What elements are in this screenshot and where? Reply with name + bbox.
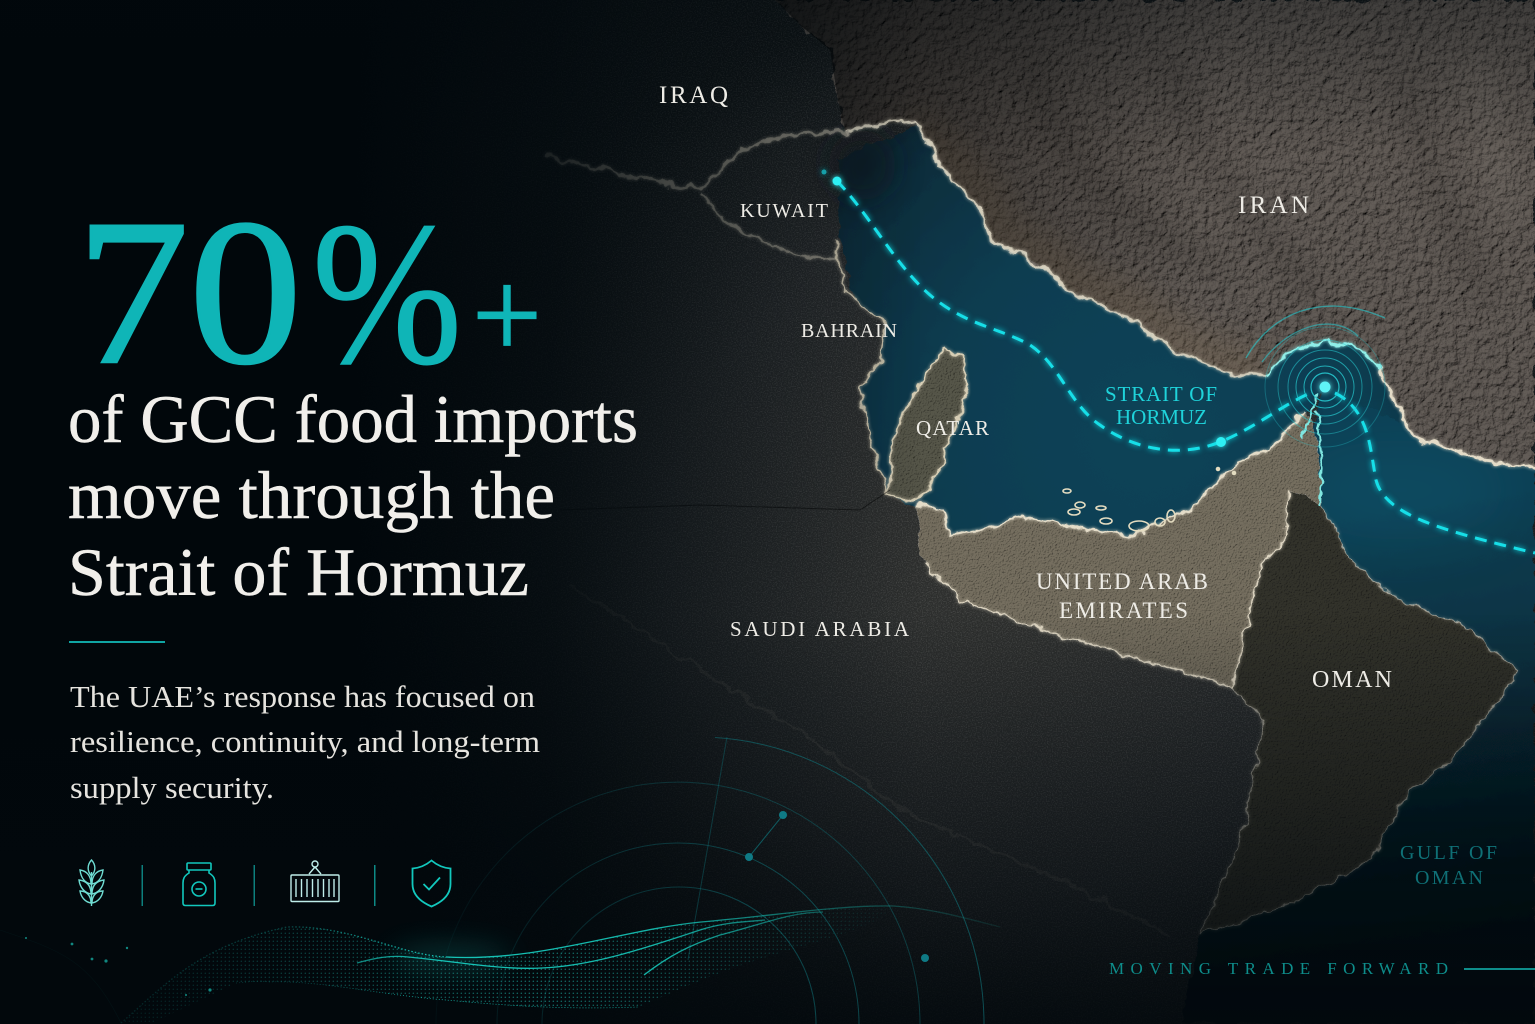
shipping route: Kuwait to strait — [822, 170, 1535, 553]
map: islands off the UAE — [1063, 468, 1236, 531]
water glow near strait — [1290, 440, 1510, 540]
divider rule — [69, 641, 165, 643]
map: Persian Gulf water — [838, 120, 1535, 1024]
heading — [68, 381, 638, 610]
decorative network arcs — [436, 737, 984, 1024]
map labels: KUWAIT — [740, 200, 828, 222]
headline stat: + — [472, 244, 542, 386]
separator — [142, 865, 143, 906]
map labels: OMAN — [1312, 667, 1392, 693]
map labels — [659, 82, 1392, 693]
icon: shield with check — [412, 860, 450, 906]
icon: shipping container — [291, 861, 339, 902]
map labels: BAHRAIN — [801, 320, 897, 342]
label: Strait of Hormuz: HORMUZ — [1116, 405, 1207, 429]
body text — [70, 679, 540, 805]
body text: The UAE’s response has focused on — [70, 679, 536, 714]
label: Gulf of Oman — [1400, 842, 1497, 889]
label: Strait of Hormuz: STRAIT OF — [1105, 382, 1217, 406]
separator — [254, 865, 255, 906]
headline stat: 70 — [76, 177, 302, 407]
map labels: QATAR — [916, 416, 989, 440]
strait radar target — [1246, 306, 1385, 447]
map: Qatar land — [888, 348, 968, 500]
heading: Strait of Hormuz — [68, 534, 529, 610]
map: Oman land — [1200, 490, 1518, 935]
body text: supply security. — [70, 770, 274, 805]
body text: resilience, continuity, and long-term — [70, 724, 540, 759]
map: Iran landmass — [760, 0, 1535, 480]
map labels: IRAN — [1238, 192, 1309, 219]
map labels: UNITED ARAB — [1036, 569, 1208, 594]
icon: jar — [183, 863, 215, 906]
label: Gulf of Oman: OMAN — [1415, 867, 1483, 889]
network nodes — [745, 811, 929, 962]
heading: move through the — [68, 457, 555, 533]
shaded head of the gulf — [828, 129, 896, 201]
route: strait to Gulf of Oman — [1335, 393, 1535, 553]
headline stat — [76, 177, 542, 407]
map labels: EMIRATES — [1059, 598, 1188, 623]
separator — [374, 865, 376, 906]
map labels: IRAQ — [659, 82, 728, 109]
tagline: moving trade forward: MOVING TRADE FORWARD — [1109, 959, 1448, 978]
map: coastlines — [545, 120, 1535, 935]
map: UAE land — [915, 410, 1320, 688]
icon: wheat — [79, 860, 104, 906]
heading: of GCC food imports — [68, 381, 638, 457]
map labels: SAUDI ARABIA — [730, 617, 910, 641]
label: Strait of Hormuz — [1105, 382, 1217, 429]
map: Gulf of Oman water — [1180, 395, 1535, 1024]
dotted data wave — [0, 906, 1000, 1024]
headline stat: % — [312, 181, 462, 407]
label: Gulf of Oman: GULF OF — [1400, 842, 1497, 864]
